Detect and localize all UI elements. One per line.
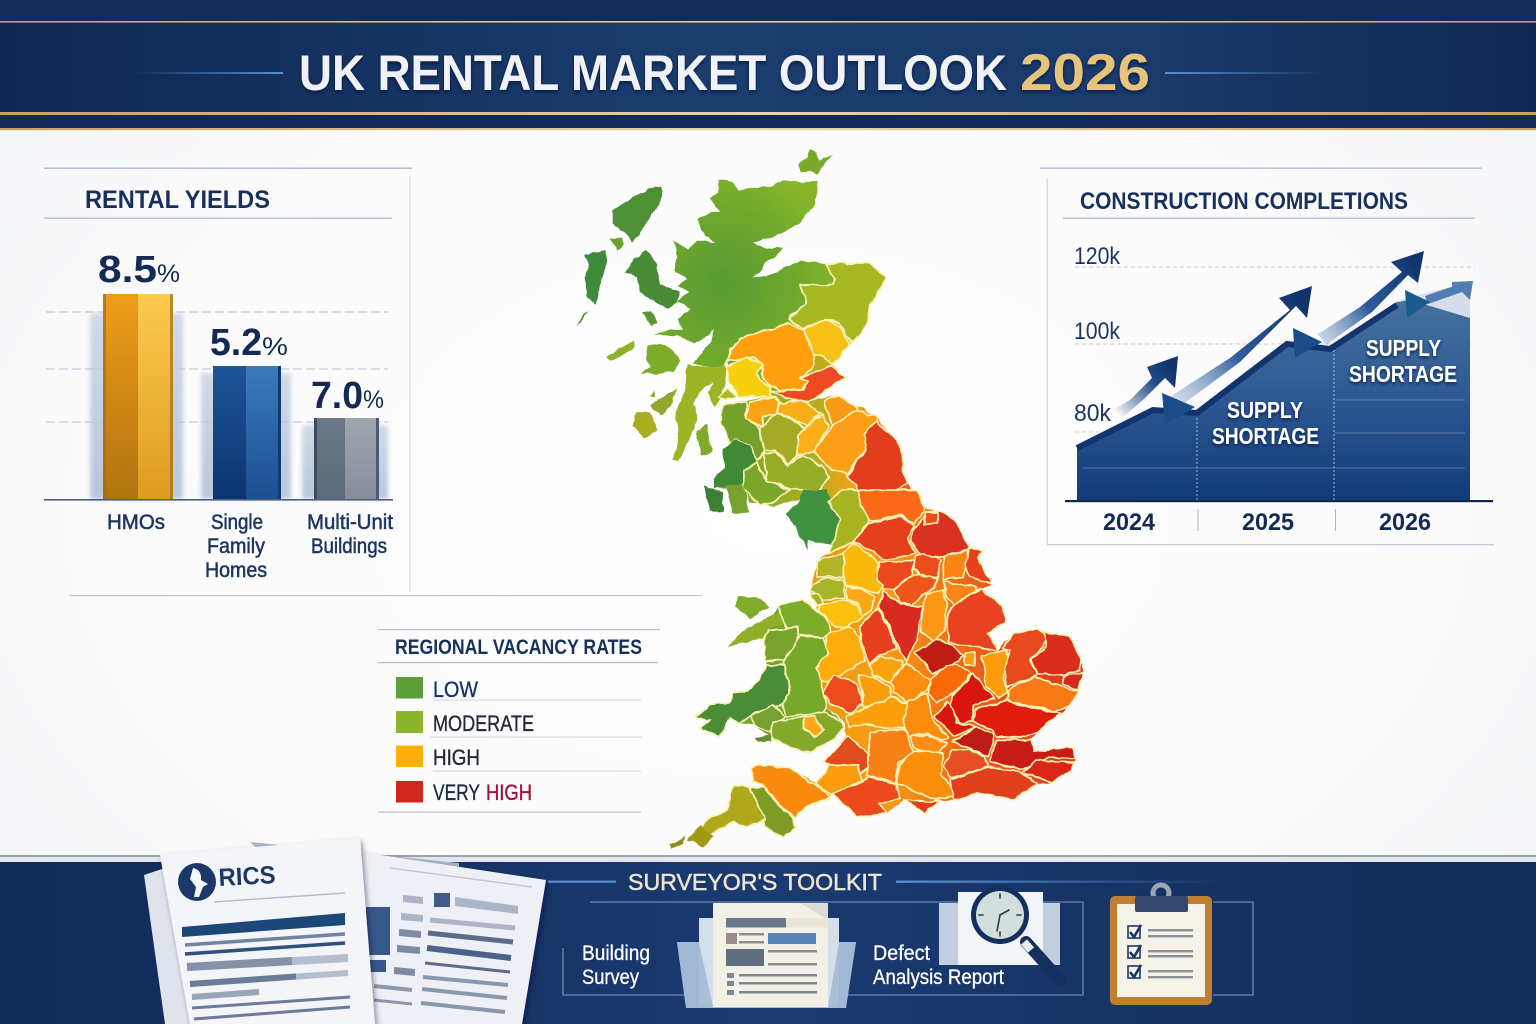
callout: supply shortage 2026: SHORTAGE bbox=[1349, 361, 1457, 387]
legend item: moderate bbox=[396, 711, 642, 738]
heading: rental yields: RENTAL YIELDS bbox=[85, 186, 270, 214]
legend item: very high bbox=[396, 780, 532, 805]
map: UK regional vacancy choropleth bbox=[576, 150, 1083, 849]
text: building survey: Survey bbox=[582, 966, 639, 989]
text: building survey: Building bbox=[582, 942, 650, 965]
axis labels bbox=[1074, 243, 1121, 427]
legend item: low bbox=[396, 677, 641, 702]
text: defect analysis report: Defect bbox=[873, 942, 930, 965]
icon: magnifying glass with document bbox=[939, 886, 1060, 980]
legend item: high bbox=[396, 745, 641, 772]
toolkit frames bbox=[563, 902, 1253, 995]
axis labels: 80k bbox=[1074, 400, 1112, 427]
callout: supply shortage 2026: SUPPLY bbox=[1366, 335, 1441, 361]
back document bbox=[360, 852, 546, 1024]
heading: construction completions: CONSTRUCTION COMPLETIONS bbox=[1080, 188, 1408, 215]
bar labels: HMOs bbox=[107, 511, 165, 534]
growth arrows bbox=[1113, 251, 1473, 425]
front document bbox=[160, 838, 375, 1024]
land base: England bbox=[752, 490, 1083, 818]
year labels: 2026 bbox=[1379, 509, 1431, 536]
line chevrons bbox=[1162, 393, 1195, 425]
text: building survey bbox=[582, 942, 650, 989]
heading: surveyor's toolkit: SURVEYOR'S TOOLKIT bbox=[628, 869, 882, 895]
footer band bbox=[0, 855, 1536, 1024]
icon: clipboard checklist bbox=[1110, 885, 1212, 1005]
map: Scotland bbox=[576, 150, 919, 516]
bar: multi-unit buildings 7.0% bbox=[302, 375, 388, 499]
bar: HMOs 8.5%: % bbox=[157, 260, 180, 288]
bar labels: Family bbox=[207, 535, 265, 558]
bar: multi-unit buildings 7.0%: % bbox=[363, 386, 384, 414]
text: defect analysis report bbox=[873, 942, 1004, 989]
bar labels: Buildings bbox=[311, 535, 387, 558]
logo: RICS: RICS bbox=[218, 861, 276, 892]
year labels: 2024 bbox=[1103, 509, 1156, 536]
bar: HMOs 8.5%: 8.5 bbox=[98, 249, 157, 291]
arrow: small 2026 bbox=[1425, 281, 1473, 304]
icon: report in folder bbox=[677, 903, 856, 1008]
legend item: very high: VERY bbox=[433, 780, 480, 805]
bar: single family homes 5.2% bbox=[201, 322, 291, 499]
legend item: low: LOW bbox=[433, 677, 478, 702]
callout: supply shortage 2026 bbox=[1349, 335, 1457, 387]
legend: regional vacancy rates: REGIONAL VACANCY RATES bbox=[395, 636, 642, 659]
legend item: moderate: MODERATE bbox=[433, 711, 534, 736]
documents: RICS reports bbox=[144, 838, 546, 1024]
panel: rental yields bbox=[44, 168, 702, 596]
land base: southern Scotland bbox=[713, 262, 919, 516]
bar labels bbox=[107, 511, 393, 582]
callout: supply shortage 2025: SUPPLY bbox=[1227, 397, 1303, 423]
arrow 2026 bbox=[1318, 251, 1424, 345]
axis labels: 100k bbox=[1074, 318, 1121, 345]
arrow 2024 bbox=[1113, 356, 1178, 418]
legend item: very high: HIGH bbox=[486, 780, 532, 805]
header banner bbox=[0, 0, 1536, 130]
callout: supply shortage 2025 bbox=[1212, 397, 1319, 449]
axis labels: 120k bbox=[1074, 243, 1121, 270]
bar: HMOs 8.5% bbox=[90, 249, 183, 499]
title: UK RENTAL MARKET OUTLOOK bbox=[299, 45, 1007, 101]
title: 2026 bbox=[1020, 44, 1150, 102]
bar: multi-unit buildings 7.0%: 7.0 bbox=[311, 375, 363, 417]
callout: supply shortage 2025: SHORTAGE bbox=[1212, 423, 1319, 449]
area chart bbox=[1077, 282, 1470, 500]
map: England and Wales bbox=[670, 490, 1083, 849]
year labels bbox=[1103, 509, 1431, 536]
bar labels: Single bbox=[211, 511, 263, 534]
logo: RICS bbox=[178, 861, 276, 901]
bar: single family homes 5.2%: % bbox=[262, 333, 288, 361]
legend: regional vacancy rates bbox=[378, 629, 660, 813]
legend item: high: HIGH bbox=[433, 745, 480, 770]
panel: construction completions bbox=[1040, 168, 1494, 545]
bar: single family homes 5.2%: 5.2 bbox=[210, 322, 262, 364]
text: defect analysis report: Analysis Report bbox=[873, 966, 1004, 989]
year labels: 2025 bbox=[1242, 509, 1294, 536]
arrow 2025 bbox=[1168, 286, 1312, 408]
land base: Wales bbox=[695, 600, 845, 753]
bar labels: Homes bbox=[205, 559, 267, 582]
bar labels: Multi-Unit bbox=[307, 511, 393, 534]
